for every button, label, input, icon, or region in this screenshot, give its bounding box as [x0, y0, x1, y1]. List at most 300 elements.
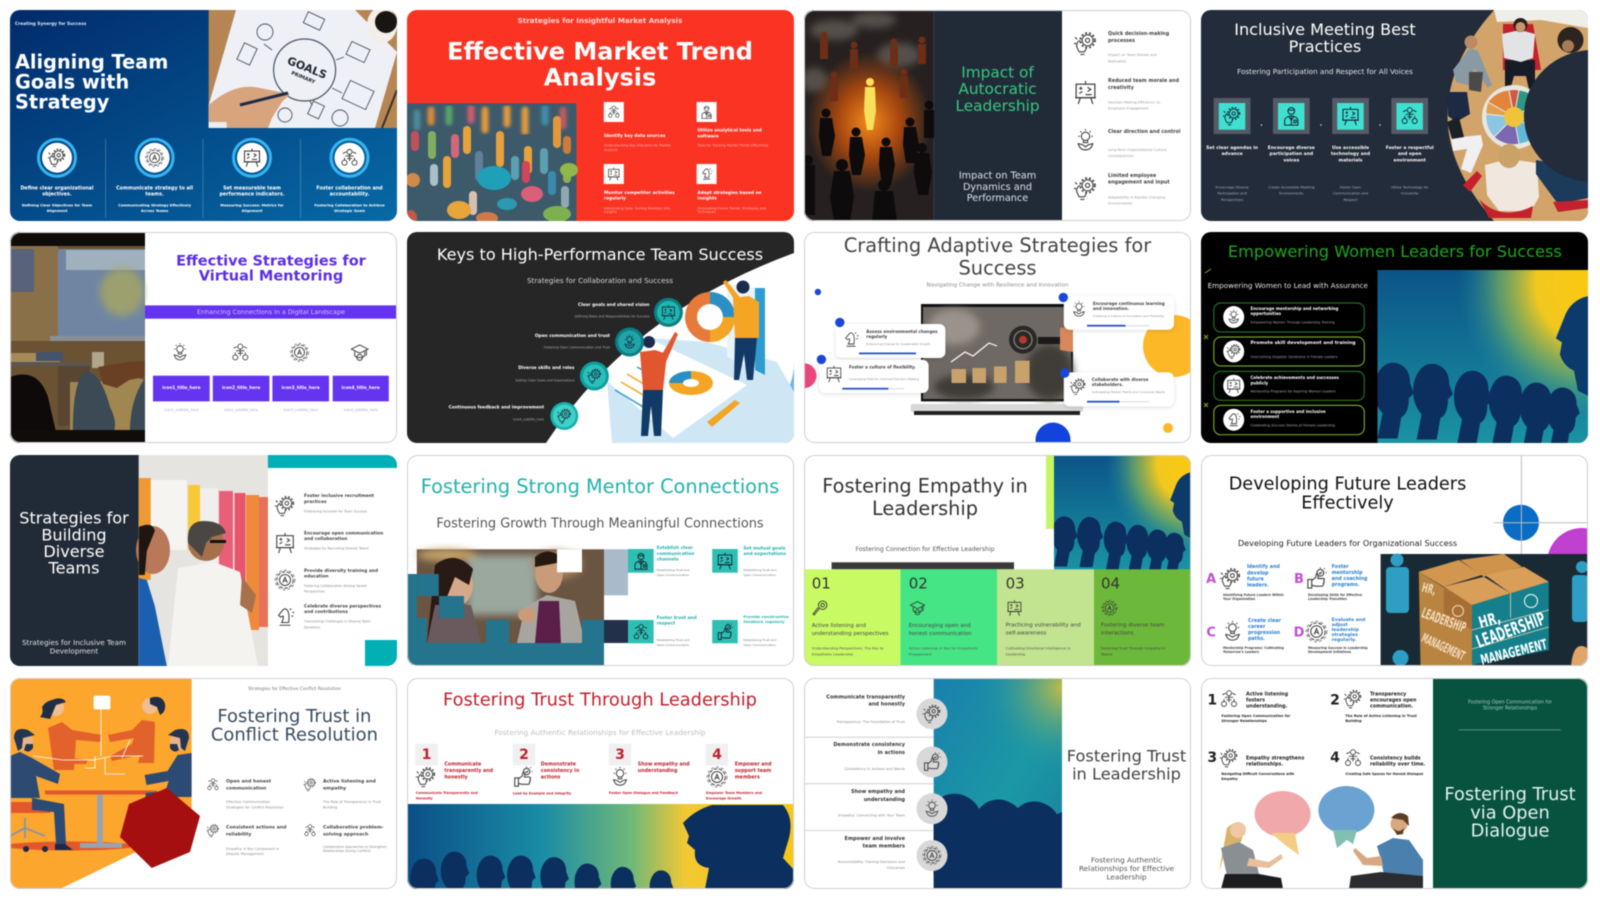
item 3: Show empathy and: [638, 761, 690, 767]
title: Strategy: [15, 90, 110, 114]
item 1: Empowering Women Through Leadership Training: [1250, 321, 1334, 325]
separators: [1260, 124, 1380, 126]
card 4: Anticipating Market Trends and Consumer Needs: [1092, 390, 1165, 394]
item 3: Monitor competitor activities: [604, 190, 675, 196]
subtitle: Fostering Authentic Relationships for Effective Leadership: [494, 728, 706, 736]
dark bar: [832, 562, 1014, 569]
item 1: Foster inclusive recruitment: [304, 493, 374, 499]
step 01: [804, 569, 900, 666]
step 03: self-awareness: [1006, 630, 1046, 636]
photo: leadership cube: LEADERSHIP: [1419, 605, 1467, 636]
item A: A: [1206, 572, 1216, 587]
photo: dim study room: [10, 232, 145, 443]
column 4: environment: [1393, 158, 1426, 164]
subtitle: Developing Future Leaders for Organizational Success: [1237, 538, 1457, 548]
title: [1067, 746, 1186, 783]
item 2: Employee Engagement: [1108, 107, 1149, 111]
item 3: icon3_title_here: [282, 385, 320, 391]
subtitle: Fostering Open Communication for: [1467, 699, 1552, 705]
item 3: [275, 568, 378, 594]
step 03: Cultivating Emotional Intelligence in: [1006, 647, 1071, 651]
item 4: Establishing Trust and: [743, 638, 776, 642]
column 1: Set clear agendas in: [1206, 145, 1258, 151]
step 01: Active listening and: [812, 623, 866, 629]
item 1: 1: [422, 746, 431, 762]
item 2: Fostering Open Communication and Trust: [544, 346, 611, 350]
step 02: 02: [909, 574, 928, 592]
subtitle: Fostering Authentic: [1091, 855, 1162, 864]
step 02: [900, 569, 997, 666]
item 4: [706, 743, 772, 800]
figure: woman: [1218, 822, 1282, 888]
card border: [1201, 456, 1587, 666]
column 1: Participation and: [1217, 192, 1246, 196]
title: Teams: [48, 558, 99, 578]
subtitle: Performance: [967, 193, 1028, 204]
column 3: performance indicators.: [219, 192, 285, 198]
row 3: [838, 788, 948, 824]
item 4: and contributions: [304, 609, 348, 615]
subtitle band: [145, 306, 397, 319]
column 1: Alignment: [47, 209, 68, 213]
item 2: icon2_title_here: [222, 385, 260, 391]
item B: programs.: [1331, 582, 1359, 588]
column 1: advance: [1221, 151, 1242, 157]
title: Leadership: [955, 97, 1040, 115]
item 2: Lead by Example and Integrity: [513, 791, 572, 795]
step 02: Encouraging open and: [909, 623, 971, 629]
item 4: Empower Team Members and: [706, 790, 763, 794]
item 3: 3: [615, 746, 625, 762]
item 4: Adapt strategies based on: [697, 190, 761, 196]
column 1: Encourage Diverse: [1215, 186, 1248, 190]
item 4: Provide constructive: [743, 614, 789, 619]
panel: aligning team goals: [9, 9, 398, 222]
item 2: Transparency: [1370, 691, 1407, 697]
item 4: solving approach: [323, 831, 368, 837]
item A: [1206, 564, 1284, 601]
column 2: Encourage diverse: [1267, 145, 1314, 151]
title: [955, 63, 1040, 115]
title: [1444, 784, 1575, 841]
column 3: [1330, 98, 1370, 202]
item C: Mentorship Programs: Cultivating: [1222, 646, 1284, 650]
row 1: Transparency: The Foundation of Trust: [836, 720, 906, 724]
card 3: Encourage continuous learning: [1093, 301, 1165, 306]
item B: Foster: [1331, 564, 1349, 570]
item 1: Open Communication: [657, 573, 689, 577]
column 4: accountability.: [330, 192, 370, 198]
title: Fostering Trust in: [217, 706, 371, 726]
step 03: Leadership: [1006, 652, 1026, 656]
illustration: two people talking: [1218, 786, 1422, 888]
photo: silhouettes with gradient: [1374, 270, 1588, 451]
item 2: Utilize analytical tools and: [697, 128, 762, 134]
row 3: Empathy: Connecting with Your Team: [838, 813, 905, 817]
step 02: Engagement: [909, 652, 932, 656]
illustration: team analysing charts: [546, 253, 794, 443]
item 4: 4: [712, 746, 722, 762]
photo: coloured market pieces: [405, 103, 578, 226]
column 3: [219, 139, 285, 213]
item 1: Motivation: [1108, 59, 1126, 63]
title: [15, 50, 168, 114]
subtitle: Navigating Change with Resilience and Innovation: [927, 283, 1069, 289]
item 4: feedback regularly: [743, 619, 785, 624]
column 4: Foster a respectful: [1385, 145, 1434, 151]
column 2: participation and: [1269, 151, 1313, 157]
panel: inclusive meeting: [1200, 9, 1589, 222]
card 4: stakeholders.: [1092, 382, 1124, 387]
item 1: icon1_title_here: [162, 385, 201, 391]
item 4: Collaborative Approaches to Strengthen: [323, 844, 387, 848]
title: [1234, 20, 1415, 56]
subtitle: Fostering Growth Through Meaningful Connections: [436, 516, 764, 532]
item 3: 3: [1207, 750, 1217, 766]
column 1: [20, 139, 94, 213]
subtitle: Strategies for Inclusive Team: [22, 638, 126, 647]
item 3: Celebrate achievements and successes: [1250, 375, 1339, 380]
item 1: Stronger Relationships: [1221, 718, 1266, 722]
column 3: materials: [1338, 158, 1362, 164]
item 1: Communicate Transparently and: [416, 790, 478, 794]
item C: progression: [1248, 630, 1280, 636]
photo: goals sketch on desk: GOALS: [285, 54, 329, 82]
item 4: [1074, 173, 1170, 205]
column 3: Communication and: [1332, 192, 1368, 196]
panel: developing future leaders: [1200, 454, 1588, 667]
title: Conflict Resolution: [211, 724, 378, 745]
item 4: support team: [735, 768, 771, 774]
item 3: [272, 344, 329, 412]
item 1: Active listening: [1246, 691, 1288, 697]
row 4: Accountability: Owning Decisions and: [838, 860, 905, 864]
column 1: Define clear organizational: [20, 186, 94, 192]
title: Success: [958, 257, 1037, 280]
item 2: creativity: [1108, 85, 1135, 91]
column 3: Foster Open: [1339, 186, 1361, 190]
item 4: Adaptability in Rapidly Changing: [1108, 195, 1165, 199]
item 3: Empathy: [1221, 776, 1238, 780]
card 1: Assess environmental changes: [866, 329, 938, 334]
item 2: actions: [541, 774, 561, 780]
column 2: teams.: [145, 192, 164, 198]
item 1: honestly: [444, 774, 469, 780]
card 1: regularly: [866, 334, 888, 339]
item 4: environment: [1250, 414, 1279, 419]
item 3: Navigating Difficult Conversations with: [1221, 772, 1294, 776]
item 4: Celebrating Success Stories of Female Leadership: [1250, 424, 1335, 428]
illustration: meeting at a table: [5, 678, 200, 888]
item 2: Promote skill development and training: [1250, 340, 1355, 346]
title: Fostering Trust Through Leadership: [443, 689, 757, 710]
row 2: in actions: [878, 750, 905, 756]
item 4: Open Communication: [743, 643, 776, 647]
column 3: Alignment: [242, 209, 263, 213]
title: Diverse: [43, 542, 105, 561]
item D: D: [1293, 626, 1304, 640]
panel: trust via open dialogue: [1200, 677, 1589, 890]
title: [176, 254, 367, 285]
row 4: [838, 836, 948, 870]
photo: silhouettes with gradient: [407, 804, 794, 900]
title: Keys to High-Performance Team Success: [437, 245, 763, 264]
panel: virtual mentoring: [9, 231, 398, 444]
item 1: Fostering Open Communication for: [1221, 713, 1290, 717]
step 04: [1094, 569, 1191, 666]
item C: C: [1206, 626, 1215, 640]
column 2: Create Accessible Meeting: [1268, 186, 1314, 190]
item 3: Consistent actions and: [226, 824, 286, 830]
title: via Open: [1470, 802, 1549, 823]
step 04: interactions: [1101, 630, 1134, 636]
photo: leadership cube: HR,: [1476, 608, 1502, 632]
title: Building: [41, 526, 107, 544]
item B: mentorship: [1331, 570, 1363, 576]
item D: [1293, 617, 1368, 654]
card border: [804, 456, 1190, 666]
title: [19, 508, 129, 578]
row 1: [826, 694, 948, 729]
column 2: [116, 139, 193, 213]
item 2: Establishing Trust and: [743, 568, 776, 572]
item 4: [1213, 406, 1364, 435]
item D: leadership: [1331, 627, 1359, 633]
row dividers: [804, 736, 934, 831]
item 3: regularly: [604, 196, 626, 202]
item 1: Encourage mentorship and networking: [1250, 306, 1338, 311]
item 3: Empathy: A Key Component in: [226, 846, 279, 850]
item D: Evaluate and: [1331, 617, 1365, 623]
step 01: Empathetic Leadership: [812, 652, 854, 656]
card border: [804, 10, 1190, 220]
title: Impact of: [961, 63, 1034, 81]
item 4: [696, 164, 766, 214]
subtitle: Impact on Team: [959, 170, 1036, 182]
item 2: communication.: [1370, 703, 1413, 709]
item 1: [153, 344, 210, 412]
title: Strategies for: [19, 508, 129, 528]
title: Analysis: [544, 63, 656, 91]
figure: woman in orange jacket: [40, 698, 102, 770]
title: Developing Future Leaders: [1228, 475, 1466, 495]
item A: Identifying Future Leaders Within: [1222, 593, 1284, 597]
photo: mentor conversation: [407, 549, 628, 665]
subtitle: Empowering Women to Lead with Assurance: [1207, 281, 1368, 290]
item 1: processes: [1108, 38, 1135, 44]
item 1: Understanding Key Indicators for Market: [604, 144, 671, 148]
item 3: [1207, 749, 1304, 780]
item 3: [207, 824, 286, 856]
item 1: fosters: [1246, 697, 1265, 703]
column 3: Set measurable team: [223, 186, 281, 192]
card 2: Foster a culture of flexibility.: [849, 365, 916, 370]
item 1: Defining Roles and Responsibilities for Success: [575, 315, 650, 319]
title: Virtual Mentoring: [199, 269, 343, 285]
figure: seated man right: [145, 728, 192, 798]
item 3: respect: [657, 620, 675, 626]
card 2: Leveraging Data for Informed Decision Making: [849, 377, 919, 381]
item 2: [304, 778, 382, 809]
item 4: Creating Safe Spaces for Honest Dialogue: [1345, 772, 1424, 776]
item 4: Techniques: [696, 210, 716, 214]
photo: goals sketch on desk: PRIMARY: [290, 70, 316, 86]
item 2: Tools for Tracking Market Trends Effectively: [696, 144, 768, 148]
figure: seated man left: [10, 728, 73, 852]
item 2: [276, 530, 383, 553]
item 3: Consequences: [1108, 154, 1134, 158]
item B: Developing Skills for Effective: [1308, 593, 1362, 597]
item 4: Forecasting Future Trends: Strategies and: [697, 206, 766, 210]
column 2: Communicate strategy to all: [116, 186, 193, 192]
step 04: Fostering diverse team: [1101, 622, 1164, 628]
item 2: Reduced team morale and: [1108, 78, 1180, 84]
item 4: Dynamics: [304, 625, 321, 629]
item 3: understanding: [638, 768, 678, 774]
item 4: Empower and: [735, 761, 772, 767]
item 2: [1075, 78, 1180, 111]
panel: adaptive strategies: [804, 232, 1192, 444]
step 04: Fostering Trust Through Empathy in: [1101, 647, 1165, 651]
title: Effective Strategies for: [176, 254, 367, 270]
item D: adjust: [1331, 622, 1348, 628]
item 2: and collaboration: [304, 536, 347, 542]
item 3: Open Communication: [657, 643, 689, 647]
item 1: [1213, 303, 1364, 332]
item A: develop: [1246, 570, 1269, 576]
item A: leaders.: [1246, 582, 1269, 588]
card 3: Fostering a Culture of Innovation and Flexibility: [1093, 314, 1164, 318]
card 4: Collaborate with diverse: [1092, 377, 1149, 382]
item 1: Honestly: [416, 796, 433, 800]
step 03: [997, 569, 1094, 666]
row 1: and honestly: [868, 701, 906, 707]
column 4: Inclusivity: [1400, 192, 1418, 196]
item 3: Foster trust and: [657, 615, 697, 621]
figure: red shirt analyst: [640, 332, 678, 436]
subtitle: Strategies for Effective Conflict Resolution: [248, 686, 341, 692]
item 2: The Role of Transparency in Trust: [322, 800, 382, 804]
photo: silhouettes with gradient: [1052, 455, 1191, 575]
title: Inclusive Meeting Best: [1234, 20, 1415, 39]
item 2: [535, 328, 644, 357]
row 4: Empower and involve: [845, 836, 906, 842]
item 1: [208, 778, 284, 809]
column 3: Respect: [1343, 198, 1358, 202]
item 2: consistency in: [541, 768, 580, 774]
panel: market trend analysis: [406, 9, 795, 222]
item D: regularly.: [1331, 637, 1356, 643]
subtitle: Dynamics and: [963, 182, 1032, 193]
item B: Leadership Transition: [1308, 597, 1347, 601]
item 2: [513, 743, 580, 795]
photo: glowing leader in a crowd: [800, 10, 934, 221]
item D: Measuring Success in Leadership: [1308, 646, 1368, 650]
subtitle: Leadership: [1106, 872, 1147, 881]
title: [211, 706, 378, 745]
item A: Your Organization: [1222, 597, 1256, 601]
column 3: Measuring Success: Metrics for: [220, 204, 284, 208]
item 1: Analysis: [604, 148, 618, 152]
panel: mentor connections: [406, 454, 794, 666]
item 4: Celebrate diverse perspectives: [304, 604, 381, 610]
column 2: Environments: [1279, 192, 1303, 196]
item 1: Communicate: [444, 761, 482, 767]
subtitle: Creating Synergy for Success: [15, 21, 87, 27]
item 3: [1078, 129, 1181, 158]
item 1: [1074, 31, 1170, 63]
subtitle: Stronger Relationships: [1482, 705, 1537, 711]
item 1: icon1_subtitle_here: [164, 408, 198, 412]
card 1: Embracing Change for Sustainable Growth: [866, 342, 930, 346]
laptop with growth blocks: [911, 304, 1083, 415]
item 3: relationships.: [1246, 761, 1283, 767]
item 4: Foster a supportive and inclusive: [1250, 409, 1325, 414]
item 4: Limited employee: [1108, 173, 1157, 179]
item 4: Collaborative problem-: [323, 824, 384, 830]
item 1: Quick decision-making: [1108, 31, 1170, 37]
item C: paths.: [1248, 636, 1265, 642]
item B: [1294, 564, 1368, 601]
decorative circles: [792, 289, 1205, 458]
column 4: Utilize Technology for: [1390, 186, 1428, 190]
item 3: Diverse skills and roles: [518, 365, 575, 371]
row 4: Outcomes: [887, 866, 905, 870]
title: [822, 474, 1028, 520]
subtitle band: Enhancing Connections in a Digital Landscape: [197, 308, 345, 316]
item 4: members: [735, 774, 760, 780]
item 3: icon3_subtitle_here: [284, 408, 318, 412]
item 2: Decision-Making Efficiency vs.: [1108, 100, 1161, 104]
title: [1228, 475, 1466, 513]
item 1: Clear goals and shared vision: [578, 302, 650, 308]
subtitle: Development: [50, 646, 98, 656]
item 4: 4: [1330, 750, 1340, 766]
title: Practices: [1288, 37, 1361, 56]
title: Autocratic: [958, 80, 1037, 98]
step 03: 03: [1006, 574, 1025, 592]
item 1: [275, 493, 374, 516]
item 1: [628, 545, 694, 577]
item C: Tomorrow's Leaders: [1222, 650, 1259, 654]
item 2: [1213, 337, 1364, 366]
item 1: Embracing Inclusion for Team Success: [304, 510, 367, 514]
photo: leadership cube: [1380, 554, 1588, 669]
column 1: [1206, 98, 1258, 202]
column dividers: [106, 139, 300, 218]
column 2: Across Teams: [141, 209, 168, 213]
item 3: Provide diversity training and: [304, 568, 378, 574]
item C: career: [1248, 624, 1265, 630]
item 2: [213, 344, 269, 412]
column 4: Foster collaboration and: [316, 186, 383, 192]
item 2: 2: [1330, 692, 1339, 708]
item 3: Setting Clear Goals and Expectations: [515, 379, 575, 383]
item B: and coaching: [1331, 576, 1368, 582]
item 2: [696, 102, 768, 148]
item 1: 1: [1207, 692, 1217, 708]
panel: diverse teams: [9, 454, 398, 667]
item 2: Open Communication: [743, 573, 776, 577]
connector lines: [33, 696, 143, 774]
title: Effective Market Trend: [447, 38, 753, 66]
step 04: 04: [1101, 574, 1120, 592]
subtitle: [22, 638, 126, 656]
photo: silhouettes with gradient: [923, 678, 1098, 888]
title: in Leadership: [1072, 764, 1181, 783]
item 3: Foster Open Dialogue and Feedback: [609, 790, 679, 794]
item 2: Overcoming Impostor Syndrome in Female Leaders: [1250, 355, 1337, 359]
